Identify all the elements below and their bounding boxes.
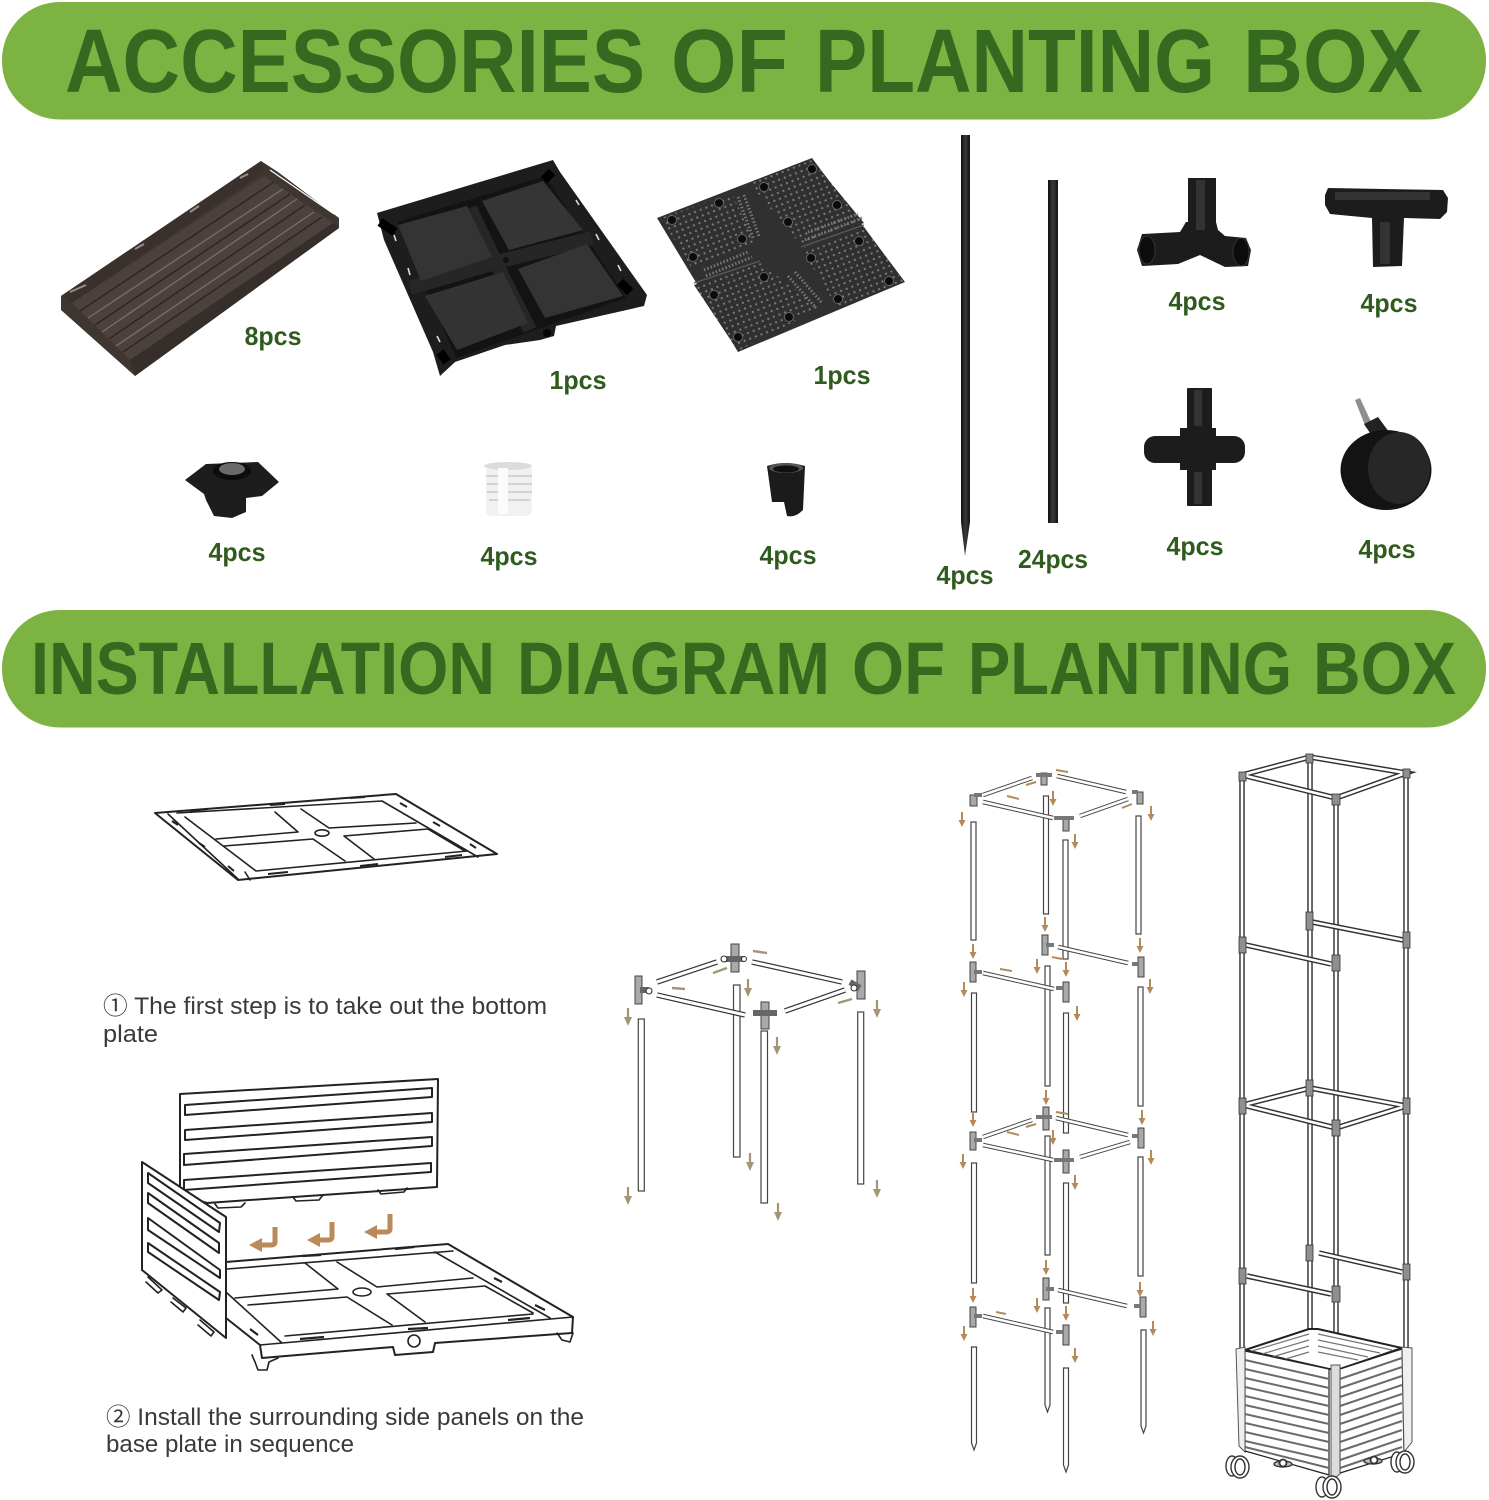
step 2 drawing: side panels on base plate (142, 1079, 573, 1370)
tower connectors (970, 773, 1146, 1345)
label: 8pcs: 8pcs (244, 321, 302, 351)
label: 4pcs caster: 4pcs (1358, 534, 1416, 564)
part: three-way corner connector (1137, 178, 1251, 267)
banner: installation title: OF (852, 627, 945, 710)
step 4 drawing: exploded full tower (958, 770, 1156, 1472)
banner: installation title: PLANTING (968, 627, 1292, 710)
part: black cup, 4pcs (767, 463, 805, 516)
label: 4pcs foot: 4pcs (208, 537, 266, 567)
step 1 caption (103, 993, 547, 1048)
step 1 caption: ① The first step is to take out the bottom (103, 993, 547, 1020)
step 1 drawing: bottom plate (155, 794, 497, 880)
label: 4pcs cup: 4pcs (760, 540, 816, 570)
banner: accessories title: BOX (1243, 12, 1423, 112)
insertion arrows (249, 1214, 390, 1252)
step 2 caption: ② Install the surrounding side panels on the (106, 1404, 584, 1431)
step 1 caption: plate (103, 1021, 158, 1048)
horizontal tubes (657, 962, 845, 1015)
label: 4pcs three-way: 4pcs (1168, 286, 1226, 316)
step 2 caption: base plate in sequence (106, 1431, 354, 1458)
banner: installation title (2, 610, 1486, 728)
assembly arrows (624, 951, 881, 1221)
step 3 drawing: exploded first frame (624, 944, 881, 1221)
banner: accessories title (2, 2, 1486, 120)
planter box (1236, 1329, 1412, 1478)
part: black base tray, 1pcs (377, 160, 647, 376)
base plate (226, 1244, 573, 1370)
vertical poles (638, 985, 864, 1203)
label: 4pcs sleeve: 4pcs (480, 541, 538, 571)
banner: installation title: INSTALLATION (31, 627, 495, 710)
label: 1pcs base: 1pcs (550, 365, 606, 395)
tower arrows (958, 770, 1156, 1363)
back slatted panel (180, 1079, 438, 1208)
connectors (635, 944, 865, 1029)
banner: accessories title: OF (671, 12, 788, 112)
banner: accessories title: ACCESSORIES (65, 12, 645, 112)
label: 1pcs plate: 1pcs (814, 360, 870, 390)
tower tubes (983, 776, 1130, 1332)
label: 4pcs T: 4pcs (1360, 288, 1418, 318)
part: perforated plate, 1pcs (657, 158, 905, 352)
part: T connector (1325, 188, 1448, 267)
step 2 caption (106, 1404, 584, 1458)
part: caster wheel (1340, 398, 1432, 510)
part: spiked pole (961, 135, 970, 556)
finished tower cross bars (1242, 757, 1406, 1294)
casters (1226, 1451, 1414, 1498)
left slatted panel (142, 1162, 226, 1338)
finished tower joints (1239, 754, 1410, 1302)
part: brown side panel tray, 8pcs (61, 161, 339, 376)
step 5 drawing: finished planter tower (1226, 754, 1414, 1498)
part: transparent sleeve, 4pcs (484, 462, 532, 516)
banner: installation title: DIAGRAM (517, 627, 830, 710)
part: straight pole (1048, 180, 1058, 523)
part: square foot, 4pcs (185, 462, 279, 518)
finished tower poles (1242, 757, 1406, 1370)
label: 24pcs: 24pcs (1018, 544, 1088, 574)
banner: accessories title: PLANTING (815, 12, 1215, 112)
label: 4pcs pole: 4pcs (936, 560, 994, 590)
part: cross connector (1144, 388, 1245, 506)
label: 4pcs cross: 4pcs (1166, 531, 1224, 561)
tower poles (971, 796, 1146, 1472)
banner: installation title: BOX (1313, 627, 1456, 710)
